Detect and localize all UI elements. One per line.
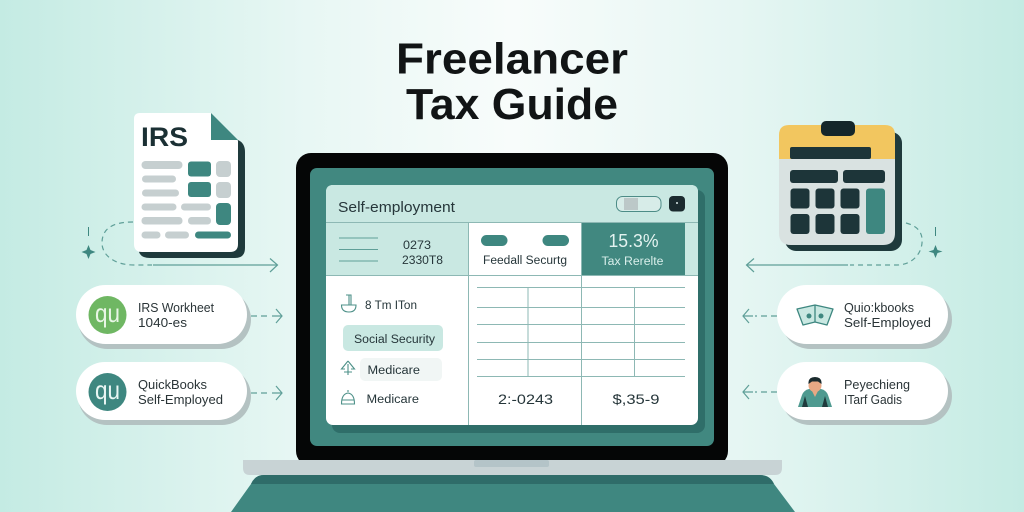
value: right total: $,35-9 [612, 391, 660, 407]
panel header [326, 185, 698, 222]
callout: Peyechieng profile [777, 362, 952, 425]
callout: QuickBooks left: QuickBooks [138, 377, 207, 392]
cell: 15.3% tax rate [582, 223, 698, 275]
value: left total: 2:-0243 [498, 391, 553, 407]
laptop stand [231, 475, 795, 512]
callout: QuickBooks right: Quio:kbooks [844, 300, 914, 315]
panel: tax worksheet window [326, 185, 698, 425]
cell: totals: 2330T8 [402, 255, 443, 267]
icon: calculator [779, 121, 902, 251]
callout: IRS Worksheet: qu [95, 298, 120, 328]
arrow: calculator to laptop [746, 223, 922, 272]
callout: IRS Worksheet: 1040-es [138, 315, 188, 330]
item: social security: Social Security [354, 334, 435, 346]
cell: federal security [481, 235, 569, 267]
icon: left sparkle [82, 227, 96, 259]
callout: Peyechieng profile: Peyechieng [844, 377, 910, 392]
title: Tax Guide [406, 81, 618, 129]
callout: QuickBooks left [76, 362, 251, 425]
title: Freelancer [396, 36, 628, 84]
list: sidebar items: 8 Tm ITon [365, 298, 417, 312]
icon: sidebar pin [342, 295, 356, 312]
icon: sidebar arrow [342, 361, 354, 375]
gridlines [326, 222, 698, 425]
laptop base [243, 460, 782, 475]
callout: IRS Worksheet [76, 285, 251, 349]
callout: QuickBooks right [777, 285, 952, 349]
arrow: QuickBooks right to laptop [743, 309, 777, 323]
callout: Peyechieng profile: ITarf Gadis [844, 392, 902, 407]
cell: federal security: Feedall Securtg [483, 255, 567, 267]
list: sidebar items [342, 295, 443, 406]
icon: IRS document: IRS [141, 122, 188, 152]
laptop [243, 153, 782, 475]
cell: 15.3% tax rate: 15.3% [608, 231, 658, 251]
icon: sidebar bell [342, 390, 354, 404]
callout: QuickBooks left: qu [95, 375, 120, 405]
cell: totals: 0273 [403, 240, 431, 252]
item: medicare highlighted: Medicare [368, 365, 420, 377]
arrow: IRS document to laptop [102, 222, 278, 272]
arrow: QuickBooks left to laptop [251, 386, 282, 400]
panel header: Self-employment [338, 200, 455, 216]
callout: IRS Worksheet: IRS Workheet [138, 300, 214, 315]
icon: right sparkle [928, 227, 942, 258]
callout: QuickBooks left: Self-Employed [138, 392, 223, 407]
callout: QuickBooks right: Self-Employed [844, 315, 931, 330]
list: sidebar items: Medicare [366, 394, 419, 406]
title [396, 36, 628, 129]
cell: 15.3% tax rate: Tax Rerelte [602, 256, 664, 268]
arrow: IRS Worksheet to laptop [251, 309, 282, 323]
icon: IRS document [134, 113, 245, 258]
cell: totals [326, 223, 468, 275]
arrow: profile to laptop [743, 385, 777, 399]
